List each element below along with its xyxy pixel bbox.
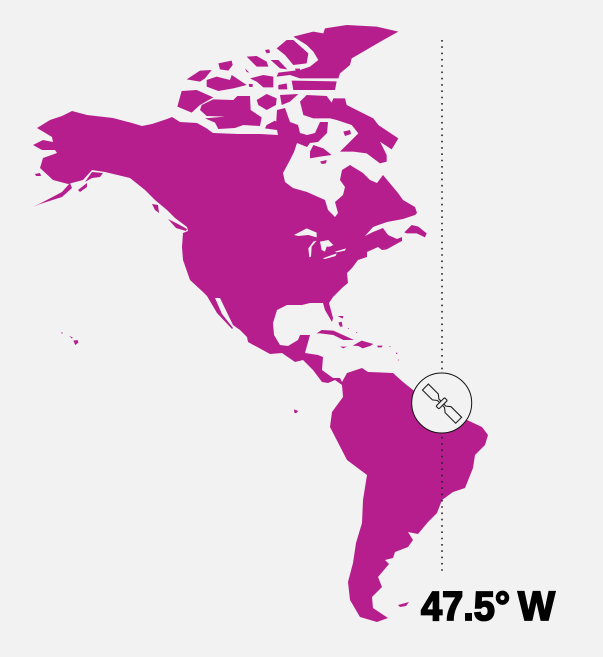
satellite badge bbox=[412, 373, 472, 433]
Galapagos bbox=[294, 409, 298, 413]
longitude label: W bbox=[518, 583, 555, 629]
map: the Americas bbox=[33, 25, 488, 622]
Great Lakes cutouts bbox=[294, 228, 346, 259]
North, Central and South America mainland bbox=[33, 108, 488, 622]
Hawaii bbox=[61, 332, 78, 345]
Vancouver Island and Haida Gwaii bbox=[152, 204, 187, 231]
Arctic archipelago bbox=[177, 25, 398, 164]
Kenai, Kodiak and Nunivak islands bbox=[35, 172, 103, 192]
meridian dotted line bbox=[441, 40, 443, 572]
Great Lakes, Newfoundland, Caribbean islands bbox=[294, 225, 427, 413]
Falkland Islands bbox=[398, 602, 409, 607]
Alaska Peninsula and Aleutians bbox=[33, 183, 72, 207]
longitude label: 47.5° bbox=[421, 583, 510, 629]
icon: satellite bbox=[421, 383, 463, 425]
